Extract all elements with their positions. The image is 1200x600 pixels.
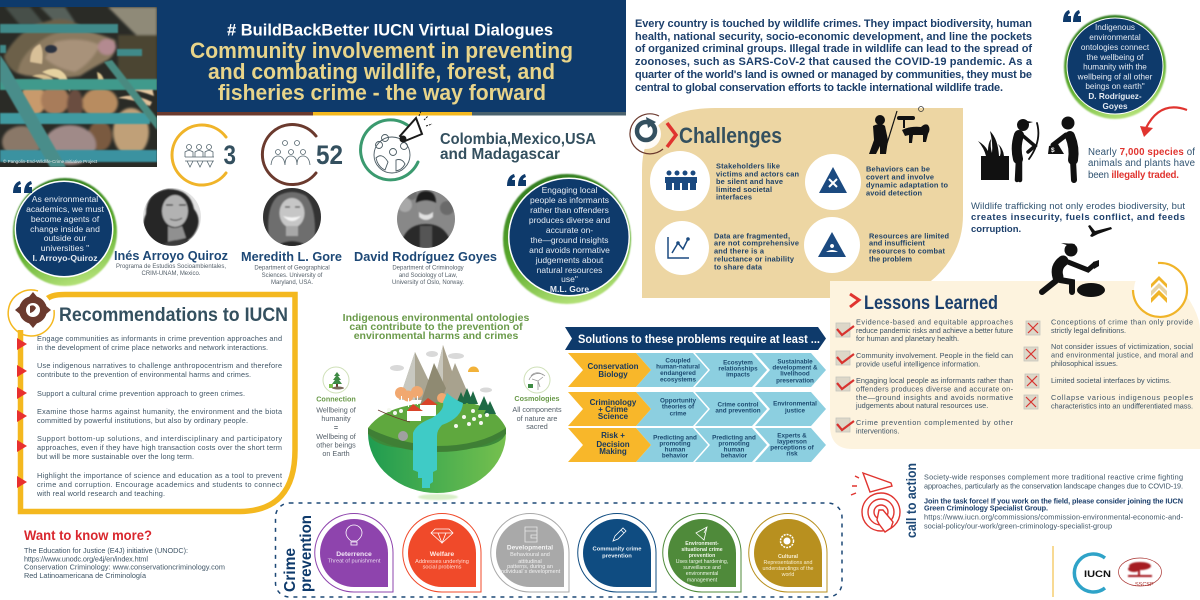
icon: globe with people bbox=[374, 134, 410, 173]
card: deterrence: Threat of punishment bbox=[328, 558, 381, 564]
text: species traded: Nearly 7,000 species of bbox=[1088, 147, 1195, 158]
challenge: stakeholders: interfaces bbox=[716, 192, 752, 202]
connection bbox=[316, 367, 356, 458]
list: recommendations bbox=[36, 334, 283, 498]
row: risk and decision making: Predicting and bbox=[653, 434, 697, 442]
card: deterrence bbox=[315, 514, 393, 592]
quote: M.L. Gore: Engaging local bbox=[542, 185, 597, 195]
speaker names and affiliations: Maryland, USA. bbox=[271, 280, 313, 286]
heading: environmental harms and crimes bbox=[354, 330, 518, 342]
speaker names and affiliations: Department of Geographical bbox=[254, 266, 330, 272]
card: community crime prevention: Community crime bbox=[593, 546, 642, 552]
row: risk and decision making: behavior bbox=[662, 452, 689, 460]
text: approaches, particularly as the conservation landscape changes due to COVID-19. bbox=[924, 482, 1183, 490]
logo: SSCSP: SSCSP bbox=[1135, 582, 1154, 588]
card: environment-situational: environmental bbox=[686, 571, 718, 577]
list: positive lessons: the—ground insights and avoids normative bbox=[856, 393, 1013, 402]
stat: countries bbox=[361, 111, 596, 180]
row: conservation biology: Conservation bbox=[587, 362, 639, 371]
panel: lessons learned bbox=[830, 243, 1200, 449]
quote: M.L. Gore: people as informants bbox=[530, 195, 609, 205]
list: negative lessons: philosophical issues. bbox=[1051, 359, 1118, 368]
row: conservation biology: Sustainable bbox=[777, 358, 813, 366]
challenge: fragmented data: reluctance or inability bbox=[714, 254, 795, 264]
card: developmental: attitudinal bbox=[518, 559, 542, 565]
stat: 52 participants bbox=[262, 125, 343, 184]
row: conservation biology: Biology bbox=[598, 370, 628, 379]
want to know more bbox=[24, 528, 225, 580]
want to know more: Red Latinoamericana de Criminología bbox=[24, 571, 147, 580]
text: https://www.iucn.org/commissions/commission-environmental-economic-and- bbox=[924, 512, 1184, 522]
heading bbox=[343, 312, 529, 342]
text: wildlife trafficking: creates insecurity, fuels conflict, and feeds bbox=[971, 212, 1185, 223]
heading rotated: prevention bbox=[298, 515, 315, 592]
row: conservation biology: ecosystems bbox=[660, 376, 697, 384]
list: positive lessons bbox=[836, 318, 1014, 436]
row: risk and decision making: promoting bbox=[718, 440, 750, 448]
card: welfare: social problems bbox=[423, 564, 462, 570]
list: negative lessons bbox=[1024, 318, 1193, 410]
speaker names and affiliations: Programa de Estudios Socioambientales, bbox=[116, 264, 226, 270]
text: wildlife trafficking: corruption. bbox=[971, 224, 1021, 235]
row: criminology and crime science: Crime control bbox=[718, 402, 759, 408]
row: criminology and crime science: theories of bbox=[662, 404, 695, 410]
quote: D. Rodríguez-Goyes: Goyes bbox=[1102, 102, 1128, 111]
icon: lessons chevron ring bbox=[1133, 263, 1187, 317]
list: positive lessons: Community involvement. People in the field can bbox=[856, 351, 1013, 360]
list: negative lessons: Not consider issues of victimization, social bbox=[1051, 342, 1193, 351]
list: negative lessons: strictly legal definitions. bbox=[1051, 326, 1126, 335]
list: positive lessons: Evidence-based and equitable approaches bbox=[856, 318, 1013, 326]
challenge: covert behaviors: Behaviors can be bbox=[866, 164, 930, 174]
list: recommendations: contribute to the prevention of environmental harms and crimes. bbox=[37, 370, 251, 379]
list: recommendations: Examine those harms against humanity, the environment and the biota bbox=[37, 407, 283, 416]
speaker names and affiliations: Sciences. University of bbox=[262, 273, 323, 279]
row: risk and decision making: behavior bbox=[721, 452, 748, 460]
quote: I. Arroyo-Quiroz bbox=[13, 178, 117, 286]
icon: chevron bbox=[850, 294, 859, 307]
icon: chevron bbox=[667, 123, 676, 147]
chart: solutions matrix bbox=[565, 327, 826, 462]
row: conservation biology: endangered bbox=[660, 370, 696, 377]
quote: M.L. Gore: produces diverse and bbox=[529, 215, 610, 225]
challenge: stakeholders: be silent and have bbox=[716, 177, 783, 186]
quote: I. Arroyo-Quiroz: change inside and bbox=[30, 224, 100, 234]
intro paragraph: quarter of the world's land is owned or managed by communities, they must be bbox=[635, 69, 1032, 81]
quote: M.L. Gore: judgements about bbox=[535, 255, 604, 265]
row: conservation biology: impacts bbox=[726, 372, 750, 378]
row: risk and decision making: promoting bbox=[659, 440, 691, 448]
panel: recommendations to IUCN bbox=[8, 290, 295, 512]
card: environment-situational: Uses target hardening, bbox=[676, 559, 728, 565]
list: recommendations: Support bottom-up solutions, and interdisciplinary and participatory bbox=[37, 434, 282, 443]
connection: on Earth bbox=[322, 449, 350, 458]
challenge: fragmented data: Data are fragmented, bbox=[714, 232, 790, 240]
list: positive lessons: reduce pandemic risks and achieve a better future bbox=[856, 326, 1013, 335]
event line: # BuildBackBetter IUCN Virtual Dialogues bbox=[227, 22, 553, 40]
connection: other beings bbox=[316, 440, 356, 450]
list: recommendations: but will be more sustainable over the long term. bbox=[37, 452, 194, 461]
quote: M.L. Gore: use" bbox=[561, 274, 578, 284]
cosmologies: sacred bbox=[526, 422, 548, 431]
quote: D. Rodríguez-Goyes: wellbeing of all other bbox=[1077, 72, 1153, 82]
portrait: Meredith L. Gore bbox=[263, 188, 321, 246]
icon: megaphone bbox=[400, 111, 432, 142]
row: risk and decision making: perceptions of bbox=[770, 444, 815, 452]
quote: D. Rodríguez-Goyes: the wellbeing of bbox=[1087, 53, 1144, 62]
challenge: covert behaviors: dynamic adaptation to bbox=[866, 180, 948, 190]
want to know more: The Education for Justice (E4J) initiative (UNODC): bbox=[24, 546, 188, 555]
list: recommendations: committed by powerful institutions, but also by ordinary people. bbox=[37, 416, 248, 425]
icon: airplane bbox=[1088, 225, 1112, 237]
intro paragraph: health, national security, socio-economic development, and line the pockets bbox=[635, 31, 1032, 43]
text: Join the task force! If you work on the field, please consider joining the IUCN bbox=[924, 496, 1183, 506]
quote: D. Rodríguez-Goyes: environmental bbox=[1089, 33, 1141, 42]
speaker names and affiliations: CRIM-UNAM, Mexico. bbox=[141, 271, 201, 277]
challenge: stakeholders: limited societal bbox=[716, 185, 772, 194]
text: species traded: been illegally traded. bbox=[1088, 170, 1179, 181]
challenge: stakeholders: Stakeholders like bbox=[716, 162, 780, 170]
photo: pangolin in a cage: © Pangolin-End-Wildlife-Crime Initiative Project bbox=[3, 158, 98, 164]
list: positive lessons: offenders produces diverse and accurate on- bbox=[856, 384, 1014, 394]
text: wildlife trafficking bbox=[971, 201, 1185, 235]
stat: countries: and Madagascar bbox=[440, 146, 560, 163]
challenge: covert behaviors: avoid detection bbox=[866, 188, 922, 198]
connection: Connection bbox=[316, 394, 356, 404]
challenge: covert behaviors bbox=[805, 154, 948, 210]
card: deterrence: Deterrence bbox=[336, 551, 372, 558]
icon: trafficking silhouette bbox=[978, 116, 1074, 180]
cosmologies: Cosmologies bbox=[514, 394, 560, 403]
section: indigenous ontologies bbox=[316, 312, 562, 500]
connection: humanity bbox=[321, 414, 351, 423]
row: risk and decision making: Decision bbox=[596, 440, 630, 449]
want to know more: Conservation Criminology: www.conservationcriminology.com bbox=[24, 562, 225, 572]
arrow: red curved bbox=[1140, 107, 1187, 137]
challenge: covert behaviors: covert and involve bbox=[866, 172, 934, 182]
card: cultural bbox=[749, 514, 827, 592]
stat: 52 participants: 52 bbox=[316, 140, 343, 170]
intro paragraph: zoonoses, such as SARS-CoV-2 that caused the COVID-19 pandemic. As a bbox=[635, 56, 1033, 68]
challenge: limited resources bbox=[804, 217, 949, 273]
row: conservation biology bbox=[568, 353, 826, 387]
row: criminology and crime science: crime bbox=[670, 410, 687, 418]
panel: challenges bbox=[630, 106, 963, 298]
portrait: Inés Arroyo Quiroz bbox=[143, 188, 201, 246]
row: conservation biology: Ecosytem bbox=[723, 360, 753, 366]
quote: D. Rodríguez-Goyes: ontologies connect bbox=[1081, 43, 1150, 52]
intro paragraph: of organized criminal groups. Illegal trade in wildlife can lead to the spread of bbox=[635, 43, 1032, 55]
row: risk and decision making: Experts & bbox=[777, 432, 807, 440]
call to action bbox=[851, 463, 1184, 538]
card: community crime prevention: prevention bbox=[602, 554, 632, 560]
list: positive lessons: provide useful intelligence information. bbox=[856, 360, 980, 368]
text: species traded bbox=[1088, 147, 1195, 181]
row: conservation biology: Coupled bbox=[665, 358, 691, 364]
list: recommendations: in the development of crime place networks and network interactions. bbox=[37, 343, 268, 352]
cosmologies: All components bbox=[512, 405, 562, 414]
heading: Recommendations to IUCN bbox=[59, 304, 288, 326]
quote: I. Arroyo-Quiroz: outside our bbox=[44, 233, 86, 243]
row: criminology and crime science bbox=[568, 392, 826, 426]
main title: Community involvement in preventing bbox=[190, 38, 573, 63]
quote: I. Arroyo-Quiroz: I. Arroyo-Quiroz bbox=[32, 253, 98, 263]
speaker names and affiliations: Department of Criminology bbox=[392, 266, 464, 272]
challenge: fragmented data: are not comprehensive bbox=[714, 238, 799, 248]
panel: crime prevention bbox=[276, 503, 842, 597]
challenge: limited resources: the problem bbox=[869, 254, 912, 264]
speaker names and affiliations: and Sociology of Law, bbox=[399, 273, 458, 279]
speaker names and affiliations: University of Oslo, Norway. bbox=[392, 280, 464, 286]
list: recommendations: Support a cultural crime prevention approach to green crimes. bbox=[37, 389, 245, 398]
card: environment-situational: prevention bbox=[689, 553, 715, 559]
main title bbox=[190, 38, 573, 105]
text bbox=[924, 472, 1184, 530]
row: criminology and crime science: Criminology bbox=[590, 398, 637, 407]
quote: I. Arroyo-Quiroz: become agents of bbox=[31, 214, 100, 224]
heading: Indigenous environmental ontologies bbox=[343, 312, 529, 324]
list: recommendations: Highlight the importance of science and education as a tool to prevent bbox=[37, 471, 282, 480]
header: title banner bbox=[0, 0, 626, 116]
challenge: limited resources: Resources are limited bbox=[869, 232, 949, 240]
text: Green Criminology Specialist Group. bbox=[924, 504, 1048, 512]
row: criminology and crime science: Opportunity bbox=[660, 398, 697, 404]
row: criminology and crime science: Science bbox=[598, 412, 629, 421]
want to know more: Want to know more? bbox=[24, 528, 152, 543]
challenge: fragmented data: to share data bbox=[714, 262, 763, 272]
list: negative lessons: and environmental justice, and moral and bbox=[1051, 350, 1193, 360]
list: recommendations: crime and corruption. Encourage academics and students to connect bbox=[37, 480, 282, 489]
photo: pangolin in a cage bbox=[0, 7, 157, 167]
stat: countries: Colombia,Mexico,USA bbox=[440, 131, 596, 148]
row: conservation biology: relationships bbox=[718, 366, 758, 372]
text: social-policy/our-work/green-criminology-specialist-group bbox=[924, 522, 1112, 530]
icons: red bullets bbox=[17, 338, 27, 488]
list: recommendations: Use indigenous narratives to challenge anthropocentrism and therefore bbox=[37, 361, 282, 370]
icon: target with megaphone and hand bbox=[851, 473, 900, 532]
card: welfare: Addresses underlying bbox=[415, 559, 469, 565]
icon: hunter and lion silhouette bbox=[869, 106, 930, 154]
row: risk and decision making: Predicting and bbox=[712, 434, 756, 442]
card: environment-situational: situational crime bbox=[681, 547, 723, 553]
list: negative lessons: Collapse various indigenous peoples bbox=[1051, 393, 1193, 402]
quote: D. Rodríguez-Goyes bbox=[1063, 10, 1166, 119]
challenge: stakeholders: victims and actors can bbox=[716, 170, 799, 178]
list: recommendations: with real world research and teaching. bbox=[36, 489, 165, 498]
challenge: limited resources: and insufficient bbox=[869, 238, 926, 248]
text: Society-wide responses complement more traditional reactive crime fighting bbox=[924, 472, 1183, 482]
card: environment-situational bbox=[663, 514, 741, 592]
list: recommendations: approaches, even if they have high transaction costs over the short term bbox=[37, 443, 282, 452]
row: conservation biology: preservation bbox=[776, 378, 814, 384]
logos bbox=[1053, 546, 1162, 597]
list: positive lessons: Engaging local people as informants rather than bbox=[856, 376, 1013, 385]
card: developmental: patterns, during an bbox=[507, 564, 553, 570]
cosmologies: of nature are bbox=[517, 414, 557, 423]
stat: 3 speakers bbox=[172, 125, 236, 185]
challenge: fragmented data: and there is a bbox=[714, 246, 765, 256]
row: conservation biology: human-natural bbox=[656, 364, 700, 370]
list: negative lessons: Limited societal interfaces by victims. bbox=[1051, 376, 1171, 385]
speaker names and affiliations bbox=[114, 249, 497, 286]
quote: M.L. Gore: natural resources bbox=[537, 265, 602, 275]
row: risk and decision making: human bbox=[724, 446, 744, 454]
list: positive lessons: judgements about natural resources use. bbox=[855, 401, 988, 410]
icon: challenges ring bbox=[630, 114, 663, 154]
challenge: stakeholders bbox=[650, 151, 799, 211]
quote: D. Rodríguez-Goyes: D. Rodríguez- bbox=[1088, 92, 1142, 101]
main title: fisheries crime - the way forward bbox=[218, 80, 546, 105]
heading: Lessons Learned bbox=[864, 293, 998, 314]
speaker names and affiliations: Inés Arroyo Quiroz bbox=[114, 249, 228, 263]
intro paragraph: central to global conservation efforts to tackle international wildlife trade. bbox=[635, 82, 1003, 94]
quote: M.L. Gore: and avoids normative bbox=[529, 245, 610, 255]
text: species traded: animals and plants have bbox=[1088, 158, 1195, 169]
challenge: limited resources: resources to combat bbox=[869, 246, 946, 256]
label rotated: call to action bbox=[904, 463, 919, 538]
banner: Solutions to these problems require at least ... bbox=[578, 334, 820, 346]
illustration: landscape on hemisphere bbox=[368, 345, 506, 500]
heading rotated bbox=[282, 515, 315, 592]
quote: I. Arroyo-Quiroz: universities " bbox=[41, 243, 89, 253]
heading: can contribute to the prevention of bbox=[349, 321, 523, 333]
quote: M.L. Gore: the—ground insights bbox=[531, 235, 608, 245]
quote: M.L. Gore: M.L. Gore bbox=[550, 284, 589, 294]
row: risk and decision making: human bbox=[665, 446, 685, 454]
icon: kneeling figure bbox=[1042, 243, 1105, 297]
card: welfare: Welfare bbox=[430, 551, 454, 558]
stat: 3 speakers: 3 bbox=[224, 140, 236, 170]
speaker names and affiliations: David Rodríguez Goyes bbox=[354, 250, 497, 264]
row: criminology and crime science: and prevention bbox=[715, 408, 761, 414]
row: risk and decision making bbox=[568, 428, 826, 462]
card: environment-situational: management bbox=[687, 578, 718, 584]
cosmologies bbox=[512, 367, 562, 431]
row: risk and decision making: Risk + bbox=[601, 431, 625, 440]
row: criminology and crime science: Environmental bbox=[773, 400, 817, 408]
main title: and combating wildlife, forest, and bbox=[208, 59, 555, 84]
connection: Wellbeing of bbox=[316, 432, 356, 441]
quote: D. Rodríguez-Goyes: Indigenous bbox=[1095, 23, 1135, 32]
row: risk and decision making: layperson bbox=[777, 438, 807, 446]
card: environment-situational: Environment- bbox=[685, 541, 719, 547]
quote: D. Rodríguez-Goyes: beings on earth" bbox=[1085, 82, 1145, 91]
portrait: David Rodríguez Goyes bbox=[397, 190, 455, 248]
challenge: fragmented data bbox=[655, 221, 799, 275]
list: positive lessons: for human and planetary health. bbox=[856, 334, 959, 343]
card: community crime prevention bbox=[578, 514, 656, 592]
card: developmental: Developmental bbox=[507, 544, 553, 552]
quote: M.L. Gore: accurate on- bbox=[546, 225, 593, 235]
card: environment-situational: surveillance and bbox=[683, 565, 721, 571]
card: cultural: world bbox=[782, 572, 794, 578]
card: cultural: Cultural bbox=[778, 554, 799, 560]
heading: Challenges bbox=[679, 123, 782, 148]
speaker names and affiliations: Meredith L. Gore bbox=[241, 250, 342, 264]
row: conservation biology: development & bbox=[772, 364, 818, 372]
logo: IUCN: IUCN bbox=[1084, 569, 1111, 580]
icon: globe emblem bbox=[8, 290, 54, 336]
row: risk and decision making: Making bbox=[599, 447, 627, 456]
card: developmental: individual´s development bbox=[500, 569, 561, 575]
text: wildlife trafficking: Wildlife trafficking not only erodes biodiversity, but bbox=[971, 201, 1185, 212]
intro paragraph bbox=[635, 18, 1033, 94]
intro paragraph: Every country is touched by wildlife crimes. They impact biodiversity, human bbox=[635, 18, 1032, 30]
card: developmental: Behavioural and bbox=[510, 552, 550, 558]
row: criminology and crime science: + Crime bbox=[598, 405, 628, 414]
row: criminology and crime science: justice bbox=[784, 408, 805, 414]
list: negative lessons: Conceptions of crime than only provide bbox=[1051, 318, 1193, 326]
card: cultural: Representations and bbox=[764, 560, 812, 566]
list: positive lessons: Crime prevention complemented by other bbox=[856, 418, 1014, 427]
quote: M.L. Gore bbox=[503, 174, 631, 304]
card: developmental bbox=[491, 514, 569, 592]
quote: I. Arroyo-Quiroz: As environmental bbox=[32, 194, 98, 204]
heading rotated: Crime bbox=[282, 548, 299, 592]
quote: I. Arroyo-Quiroz: academics, we must bbox=[26, 204, 105, 214]
connection: Wellbeing of bbox=[316, 406, 356, 414]
list: recommendations: Engage communities as informants in crime prevention approaches and bbox=[37, 334, 282, 343]
card: welfare bbox=[403, 514, 481, 592]
want to know more: https://www.unodc.org/e4j/en/index.html bbox=[24, 554, 148, 564]
quote: M.L. Gore: rather than offenders bbox=[530, 205, 609, 215]
row: risk and decision making: risk bbox=[786, 450, 798, 458]
row: conservation biology: livelihood bbox=[780, 370, 810, 378]
icon: trafficking silhouette: $ bbox=[1051, 147, 1055, 154]
card: cultural: understandings of the bbox=[763, 566, 814, 572]
quote: D. Rodríguez-Goyes: humanity with the bbox=[1083, 62, 1147, 72]
banner bbox=[565, 327, 826, 350]
list: negative lessons: characteristics into an undifferentiated mass. bbox=[1051, 402, 1193, 410]
connection: = bbox=[334, 423, 338, 432]
list: positive lessons: interventions. bbox=[856, 426, 899, 436]
